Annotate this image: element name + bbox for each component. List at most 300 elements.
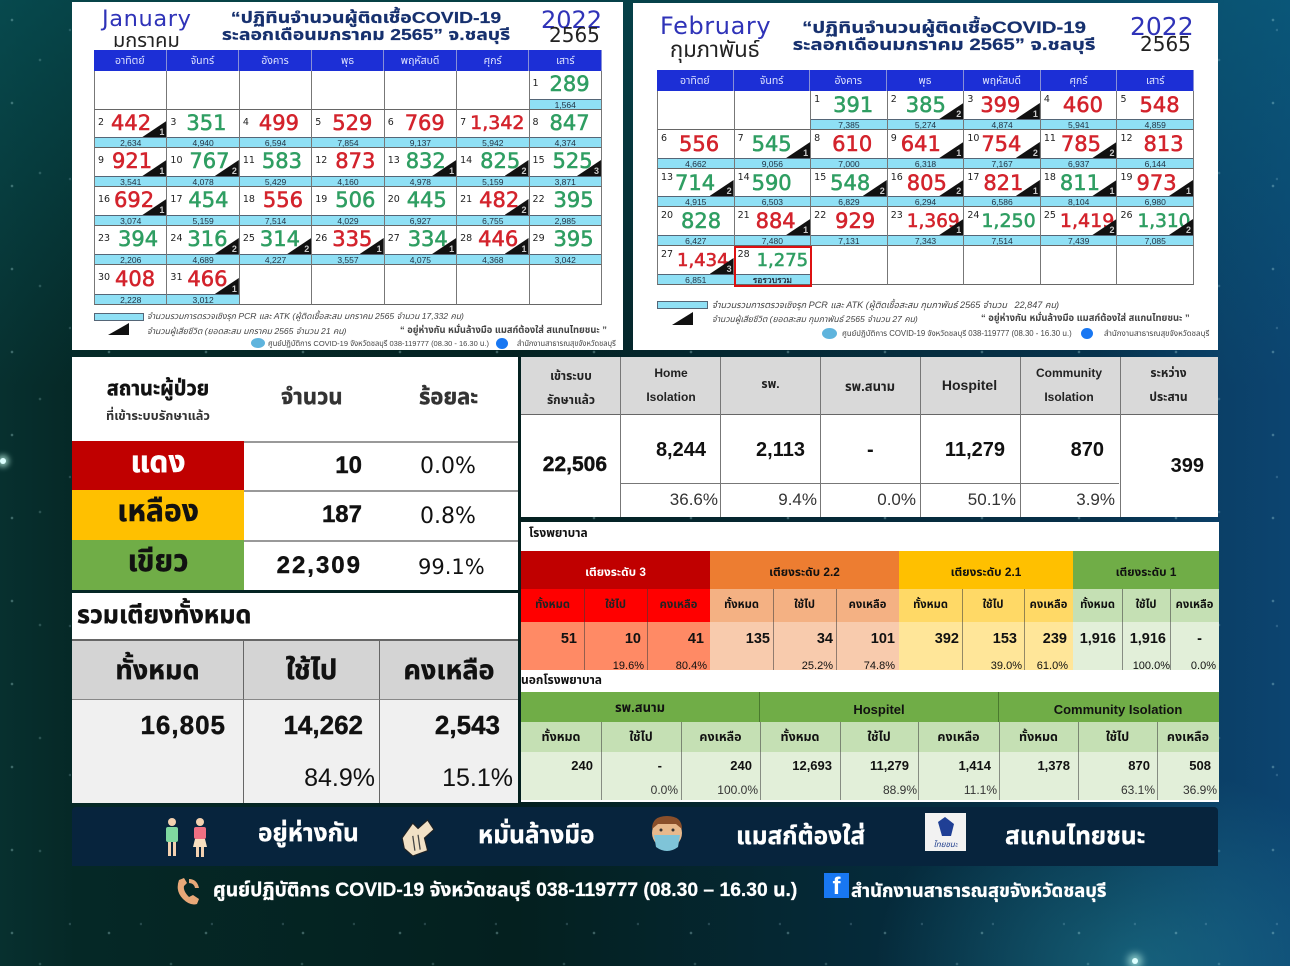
week 2: 6 bbox=[661, 133, 667, 144]
week 2: 7,854 bbox=[337, 138, 359, 148]
month title January: January bbox=[102, 6, 192, 32]
level 2.2 data bbox=[710, 622, 899, 670]
week 3: 767 bbox=[189, 149, 230, 173]
percent row: 88.9% bbox=[883, 783, 917, 797]
calendar heading bbox=[793, 16, 1095, 54]
facebook text: สำนักงานสาธารณสุขจังหวัดชลบุรี bbox=[1104, 329, 1209, 338]
week 6: 466 bbox=[187, 267, 228, 291]
header: pending bbox=[1149, 366, 1188, 404]
week 3: 19 bbox=[1120, 172, 1133, 183]
level 2.2 subheaders: คงเหลือ bbox=[849, 599, 886, 611]
week 4: 21 bbox=[738, 210, 750, 221]
week 6: 30 bbox=[98, 272, 110, 283]
calendar heading: “ปฏิทินจำนวนผู้ติดเชื้อCOVID-19 bbox=[231, 10, 501, 27]
weekday header: ศุกร์ bbox=[1069, 74, 1087, 86]
percents bbox=[613, 660, 707, 672]
yellow label: เหลือง bbox=[117, 495, 199, 528]
level 2.1 header bbox=[899, 551, 1073, 589]
used value: 14,262 bbox=[283, 710, 363, 740]
level 2.2 header bbox=[710, 551, 899, 589]
week 2: 3 bbox=[170, 117, 176, 128]
week 2: 847 bbox=[550, 111, 590, 135]
week 4: 556 bbox=[263, 188, 303, 212]
week 1: 391 bbox=[833, 93, 873, 117]
week 4: 6,755 bbox=[482, 216, 503, 226]
week 3: 1 bbox=[1109, 186, 1114, 196]
icon: two people distancing bbox=[166, 818, 207, 857]
yellow percent: 0.8% bbox=[420, 504, 476, 529]
calendar grid January bbox=[94, 50, 602, 305]
row: green bbox=[72, 540, 518, 590]
header cell: remaining: คงเหลือ bbox=[403, 655, 495, 685]
total value: 16,805 bbox=[140, 710, 226, 740]
value row: 12,693 bbox=[792, 758, 832, 773]
week 2: 8 bbox=[533, 117, 539, 128]
hospital section title: โรงพยาบาล bbox=[529, 526, 588, 540]
values: 10 bbox=[625, 631, 641, 647]
remaining value: 2,543 bbox=[435, 710, 500, 740]
red highlight box day 28 bbox=[734, 246, 812, 287]
week 4: 16 bbox=[98, 194, 110, 205]
week 3: 6,294 bbox=[915, 196, 936, 206]
level 3 header: เตียงระดับ 3 bbox=[585, 565, 646, 579]
week 2: 1 bbox=[803, 148, 808, 158]
week 1: 1 bbox=[814, 94, 820, 105]
week 4: 828 bbox=[681, 209, 721, 233]
values: 392 bbox=[935, 631, 959, 647]
week 4: 482 bbox=[479, 188, 519, 212]
level 3 group bbox=[521, 551, 710, 672]
percent row: 11.1% bbox=[964, 783, 997, 797]
week 5: 28 bbox=[738, 249, 750, 260]
value row: 870 bbox=[1128, 758, 1150, 773]
week 3: 15 bbox=[814, 172, 826, 183]
slogan: “ อยู่ห่างกัน หมั่นล้างมือ แมสก์ต้องใส่ สแกนไทยชนะ ” bbox=[400, 325, 607, 335]
year: 2022 bbox=[1130, 12, 1194, 41]
header cell: used: ใช้ไป bbox=[286, 654, 337, 685]
week 1: 4,859 bbox=[1145, 120, 1166, 130]
week 3: 2 bbox=[880, 186, 885, 196]
week 3: 821 bbox=[983, 171, 1023, 195]
subheader row: ใช้ไป bbox=[1106, 730, 1129, 744]
panel: patient status table bbox=[72, 357, 518, 590]
data cell: remaining bbox=[380, 700, 518, 803]
facebook icon bbox=[1081, 328, 1093, 339]
week 4: 18 bbox=[243, 194, 255, 205]
values: 41 bbox=[688, 631, 704, 647]
week 1: 1 bbox=[533, 78, 539, 89]
week 2: 4,662 bbox=[685, 158, 706, 168]
week 4: 1 bbox=[159, 205, 164, 215]
week 3: 4,160 bbox=[337, 176, 359, 186]
weekday header: อังคาร bbox=[261, 54, 289, 66]
level 2.2 group bbox=[710, 551, 899, 672]
week 3: 2 bbox=[232, 166, 237, 176]
week 3: 14 bbox=[738, 172, 750, 183]
row: yellow bbox=[72, 490, 518, 540]
decorative bottom star bbox=[1132, 958, 1138, 964]
month title Thai: มกราคม bbox=[113, 30, 180, 52]
percent row: 0.0% bbox=[651, 783, 678, 797]
contact line: ศูนย์ปฏิบัติการ COVID-19 จังหวัดชลบุรี 038-119777 (08.30 - 16.30 น.) bbox=[842, 329, 1072, 338]
week 2: 2 bbox=[1033, 148, 1038, 158]
values: 1,916 bbox=[1080, 631, 1116, 647]
week 5: 4,689 bbox=[192, 254, 214, 264]
values bbox=[935, 631, 1067, 647]
week 3: 583 bbox=[262, 149, 302, 173]
week 4: 6,427 bbox=[685, 236, 706, 246]
weekday header: จันทร์ bbox=[760, 74, 783, 86]
legend swatch: tests bbox=[657, 301, 708, 309]
slogan: “ อยู่ห่างกัน หมั่นล้างมือ แมสก์ต้องใส่ สแกนไทยชนะ ” bbox=[981, 312, 1190, 323]
level 1 group bbox=[1073, 551, 1219, 672]
panel: beds outside hospital bbox=[521, 692, 1219, 802]
outside hospital section title: นอกโรงพยาบาล bbox=[521, 673, 602, 687]
percents: 19.6% bbox=[613, 660, 644, 672]
calendar grid February bbox=[657, 70, 1194, 285]
percent: community isolation: 3.9% bbox=[1076, 490, 1115, 509]
week 5: 314 bbox=[260, 227, 300, 251]
week 5: 23 bbox=[98, 233, 110, 244]
weekday header: พฤหัสบดี bbox=[401, 54, 439, 66]
week 5: 335 bbox=[332, 227, 372, 251]
percent row: 100.0% bbox=[717, 783, 758, 797]
header: in system: รักษาแล้ว bbox=[547, 393, 595, 407]
week 4: 2 bbox=[1186, 225, 1191, 235]
values: 239 bbox=[1043, 631, 1067, 647]
week 3: 1 bbox=[1033, 186, 1038, 196]
header: pending: ประสาน bbox=[1149, 390, 1188, 404]
remaining percent: 15.1% bbox=[442, 764, 513, 792]
legend text: tests: จำนวนรวมการตรวจเชิงรุก PCR และ ATK (ผู้ติดเชื้อสะสม มกราคม 2565 จำนวน 17,332 คน) bbox=[147, 311, 464, 321]
week 3: 6,586 bbox=[991, 196, 1013, 206]
header cell: remaining bbox=[380, 639, 518, 700]
week 5: 3,557 bbox=[337, 254, 359, 264]
header: in system: เข้าระบบ bbox=[550, 369, 592, 383]
level 1 subheaders: คงเหลือ bbox=[1176, 599, 1213, 611]
week 2 bbox=[94, 110, 602, 148]
facebook text: สำนักงานสาธารณสุขจังหวัดชลบุรี bbox=[517, 339, 616, 348]
week 4: 1,250 bbox=[981, 210, 1036, 232]
slogan: scan Thai Chana: สแกนไทยชนะ bbox=[1005, 823, 1145, 850]
week 6: 2,228 bbox=[120, 294, 141, 304]
group header: community isolation: Community Isolation bbox=[1054, 702, 1182, 717]
week 3: 921 bbox=[112, 149, 152, 173]
calendar heading: ระลอกเดือนมกราคม 2565” จ.ชลบุรี bbox=[222, 27, 510, 44]
values: 135 bbox=[746, 631, 770, 647]
subheader row: คงเหลือ bbox=[1167, 730, 1209, 744]
week 4: 4,029 bbox=[337, 216, 359, 226]
week 2: 813 bbox=[1143, 132, 1184, 156]
group header: field hospital bbox=[521, 692, 760, 722]
percent row: 63.1% bbox=[1121, 783, 1155, 797]
week 5: 2 bbox=[304, 244, 309, 254]
week 4: 7,343 bbox=[915, 236, 936, 246]
value row: 1,378 bbox=[1037, 758, 1070, 773]
weekday header: พุธ bbox=[341, 54, 354, 66]
data cell: used bbox=[244, 700, 380, 803]
level 3 subheaders bbox=[521, 589, 710, 622]
total beds title: รวมเตียงทั้งหมด bbox=[77, 601, 251, 629]
subheader row bbox=[521, 722, 1219, 752]
week 5: 26 bbox=[315, 233, 327, 244]
percents bbox=[1133, 660, 1216, 672]
week 3: 11 bbox=[243, 155, 255, 166]
header band bbox=[521, 357, 1218, 415]
week 1 bbox=[94, 71, 602, 110]
week 4: 1,310 bbox=[1137, 211, 1190, 232]
contact line: ศูนย์ปฏิบัติการ COVID-19 จังหวัดชลบุรี 038-119777 (08.30 - 16.30 น.) bbox=[268, 339, 489, 348]
week 2: 6,937 bbox=[1068, 158, 1089, 168]
week 3 bbox=[657, 169, 1194, 207]
percent: hospitel: 50.1% bbox=[968, 490, 1016, 509]
values: - bbox=[1197, 631, 1202, 647]
week 2: 7 bbox=[738, 133, 744, 144]
week 2: 610 bbox=[832, 132, 872, 156]
red percent: 0.0% bbox=[420, 454, 476, 479]
week 2: 7,000 bbox=[838, 158, 860, 168]
yellow label bbox=[72, 490, 244, 540]
week 2: 499 bbox=[259, 111, 299, 135]
column dividers bbox=[521, 357, 1218, 517]
week 2: 1 bbox=[159, 127, 164, 137]
week 1: 1 bbox=[1033, 109, 1038, 119]
week 3: 9 bbox=[98, 155, 104, 166]
weekday header: จันทร์ bbox=[191, 54, 214, 66]
values bbox=[746, 631, 895, 647]
footer slogan band bbox=[72, 807, 1218, 866]
week 5: 27 bbox=[661, 249, 673, 260]
weekday header: พุธ bbox=[918, 74, 932, 86]
percents: 100.0% bbox=[1133, 660, 1170, 672]
week 2: 545 bbox=[752, 132, 792, 156]
level 2.1 subheaders: ใช้ไป bbox=[982, 599, 1004, 611]
week 2: 4 bbox=[243, 117, 249, 128]
value row: 11,279 bbox=[870, 758, 909, 773]
week 1: 399 bbox=[980, 93, 1020, 117]
week 4: 17 bbox=[170, 194, 183, 205]
weekday header: อาทิตย์ bbox=[680, 74, 710, 86]
level 2.1 header: เตียงระดับ 2.1 bbox=[951, 565, 1021, 579]
week 3: 13 bbox=[388, 155, 400, 166]
level 2.2 subheaders: ใช้ไป bbox=[794, 599, 815, 611]
percent heading: ร้อยละ bbox=[419, 384, 478, 409]
slogan: wear mask: แมสก์ต้องใส่ bbox=[736, 823, 865, 850]
week 4: 24 bbox=[967, 210, 979, 221]
week 3: 1 bbox=[1186, 186, 1191, 196]
level 2.1 group bbox=[899, 551, 1073, 672]
level 3 subheaders: คงเหลือ bbox=[660, 599, 697, 611]
week 4: 1 bbox=[956, 225, 961, 235]
week 2: 6,144 bbox=[1145, 158, 1166, 168]
header: community isolation: Community bbox=[1036, 366, 1102, 380]
week 4: 7,131 bbox=[838, 236, 860, 246]
week 1: 3 bbox=[967, 94, 973, 105]
week 2: 2 bbox=[98, 117, 104, 128]
panel: February calendar bbox=[633, 3, 1218, 350]
level 2.1 subheaders: คงเหลือ bbox=[1030, 599, 1067, 611]
green count: 22,309 bbox=[277, 552, 362, 579]
week 1: 1,564 bbox=[555, 100, 576, 110]
week 4: 20 bbox=[388, 194, 400, 205]
header: in system bbox=[547, 369, 595, 407]
count heading: จำนวน bbox=[281, 384, 343, 409]
week 2: 9,137 bbox=[410, 138, 431, 148]
facebook icon bbox=[496, 338, 508, 349]
week 6: 31 bbox=[170, 272, 183, 283]
week 3: 873 bbox=[335, 149, 375, 173]
header: field hospital: รพ.สนาม bbox=[845, 379, 895, 394]
values: 51 bbox=[561, 631, 577, 647]
week 4: 7,514 bbox=[991, 236, 1013, 246]
week 3: 6,503 bbox=[762, 196, 783, 206]
week 4: 2 bbox=[522, 205, 527, 215]
weekday header bbox=[94, 50, 602, 71]
level 2.2 subheaders bbox=[710, 589, 899, 622]
week 5: 1,275 bbox=[757, 250, 808, 271]
calendar heading: “ปฏิทินจำนวนผู้ติดเชื้อCOVID-19 bbox=[802, 19, 1086, 37]
week 4: 22 bbox=[814, 210, 826, 221]
week 2: 769 bbox=[405, 111, 445, 135]
week 3: 18 bbox=[1044, 172, 1056, 183]
group header: field hospital: รพ.สนาม bbox=[615, 700, 665, 715]
week 3: 4,915 bbox=[685, 196, 706, 206]
week 5: 1 bbox=[449, 244, 454, 254]
week 3: 4,978 bbox=[410, 176, 431, 186]
week 1: 4 bbox=[1044, 94, 1050, 105]
week 3: 590 bbox=[752, 171, 792, 195]
week 4: 929 bbox=[835, 209, 875, 233]
percent: home isolation: 36.6% bbox=[670, 490, 718, 509]
week 3: 825 bbox=[480, 149, 520, 173]
week 2: 4,374 bbox=[555, 138, 576, 148]
legend triangle: deaths bbox=[108, 323, 129, 335]
week 5: 394 bbox=[118, 227, 158, 251]
week 1: 460 bbox=[1063, 93, 1103, 117]
week 3: 3 bbox=[594, 166, 599, 176]
header cell: total: ทั้งหมด bbox=[115, 655, 200, 685]
week 6 bbox=[94, 265, 602, 305]
percents: 74.8% bbox=[864, 660, 895, 672]
percents bbox=[802, 660, 895, 672]
week 1: 5 bbox=[1120, 94, 1127, 105]
week 5: 1 bbox=[522, 244, 527, 254]
week 2: 7 bbox=[460, 117, 466, 128]
week 2: 11 bbox=[1044, 133, 1056, 144]
week 3: 973 bbox=[1136, 171, 1177, 195]
icon: Thai Chana badge: ไทยชนะ bbox=[933, 840, 958, 849]
value row bbox=[571, 758, 1211, 773]
level 3 subheaders: ทั้งหมด bbox=[535, 599, 570, 611]
week 2: 5,942 bbox=[482, 138, 503, 148]
red count: 10 bbox=[335, 452, 362, 479]
icon: hand washing bbox=[402, 820, 434, 856]
week 3: 1 bbox=[159, 166, 164, 176]
week 3: 10 bbox=[170, 155, 183, 166]
week 5: 25 bbox=[243, 233, 255, 244]
values: 1,916 bbox=[1130, 631, 1166, 647]
week 3: 714 bbox=[675, 171, 715, 195]
week 4: 19 bbox=[315, 194, 327, 205]
week 2: 556 bbox=[679, 132, 719, 156]
level 1 data bbox=[1073, 622, 1219, 670]
weekday header: พฤหัสบดี bbox=[982, 74, 1021, 86]
calendar heading: ระลอกเดือนมกราคม 2565” จ.ชลบุรี bbox=[793, 36, 1095, 54]
green percent: 99.1% bbox=[418, 555, 485, 579]
week 5: 24 bbox=[170, 233, 183, 244]
header: home isolation: Isolation bbox=[646, 390, 696, 404]
header: hospitel: Hospitel bbox=[942, 377, 997, 393]
week 4: 5,159 bbox=[192, 216, 214, 226]
percents: 39.0% bbox=[991, 660, 1022, 672]
data row bbox=[521, 752, 1219, 800]
week 5: 27 bbox=[388, 233, 400, 244]
month title February: February bbox=[660, 12, 771, 40]
panel: beds in hospital bbox=[521, 522, 1219, 693]
percent: hospital: 9.4% bbox=[778, 490, 817, 509]
white band covering clipped rows bbox=[521, 670, 1219, 693]
value: hospital: 2,113 bbox=[756, 439, 805, 461]
icon: phone bbox=[178, 878, 199, 904]
level 1 subheaders bbox=[1073, 589, 1219, 622]
percent rule bbox=[621, 483, 1119, 484]
week 3: 2 bbox=[522, 166, 527, 176]
week 2: 6 bbox=[388, 117, 394, 128]
week 1: 289 bbox=[550, 72, 590, 96]
values: 101 bbox=[871, 631, 895, 647]
week 4: 26 bbox=[1120, 210, 1133, 221]
percent row bbox=[651, 783, 1217, 797]
legend text: deaths: จำนวนผู้เสียชีวิต (ยอดสะสม มกราคม 2565 จำนวน 21 คน) bbox=[147, 326, 346, 336]
red label bbox=[72, 441, 244, 490]
green label: เขียว bbox=[127, 545, 189, 578]
week 4 bbox=[657, 207, 1194, 246]
level 1 subheaders: ทั้งหมด bbox=[1080, 599, 1115, 611]
weekday header: เสาร์ bbox=[556, 54, 574, 66]
panel: treatment system bbox=[521, 357, 1218, 517]
percents bbox=[991, 660, 1068, 672]
week 5: 4,075 bbox=[410, 254, 431, 264]
week 5: 6,851 bbox=[685, 274, 706, 284]
header: home isolation bbox=[646, 366, 696, 404]
week 5 bbox=[94, 226, 602, 265]
calendar heading bbox=[222, 6, 510, 44]
values: 34 bbox=[817, 631, 833, 647]
level 2.1 subheaders: ทั้งหมด bbox=[913, 599, 948, 611]
year: 2022 bbox=[541, 6, 602, 34]
weekday header: อังคาร bbox=[835, 74, 862, 86]
week 5: 4,227 bbox=[265, 254, 286, 264]
week 4: 1,419 bbox=[1060, 210, 1114, 232]
week 4: 7,480 bbox=[762, 236, 783, 246]
week 4: 445 bbox=[407, 188, 447, 212]
week 2 bbox=[657, 130, 1194, 169]
week 3: 525 bbox=[553, 149, 593, 173]
week 4: 3,074 bbox=[120, 216, 141, 226]
week 2: 8 bbox=[814, 133, 820, 144]
week 1 bbox=[657, 91, 1194, 130]
value row: 1,414 bbox=[958, 758, 991, 773]
values: 153 bbox=[993, 631, 1017, 647]
slogan: wash hands: หมั่นล้างมือ bbox=[478, 822, 595, 849]
week 2: 529 bbox=[332, 111, 372, 135]
icon: face with mask bbox=[652, 816, 682, 851]
week 6: 1 bbox=[232, 284, 237, 294]
week 5: 334 bbox=[408, 227, 448, 251]
contact line: ศูนย์ปฏิบัติการ COVID-19 จังหวัดชลบุรี 038-119777 (08.30 – 16.30 น.) bbox=[213, 880, 797, 901]
week 5: 3,042 bbox=[555, 254, 576, 264]
week 3: 5,159 bbox=[482, 176, 503, 186]
